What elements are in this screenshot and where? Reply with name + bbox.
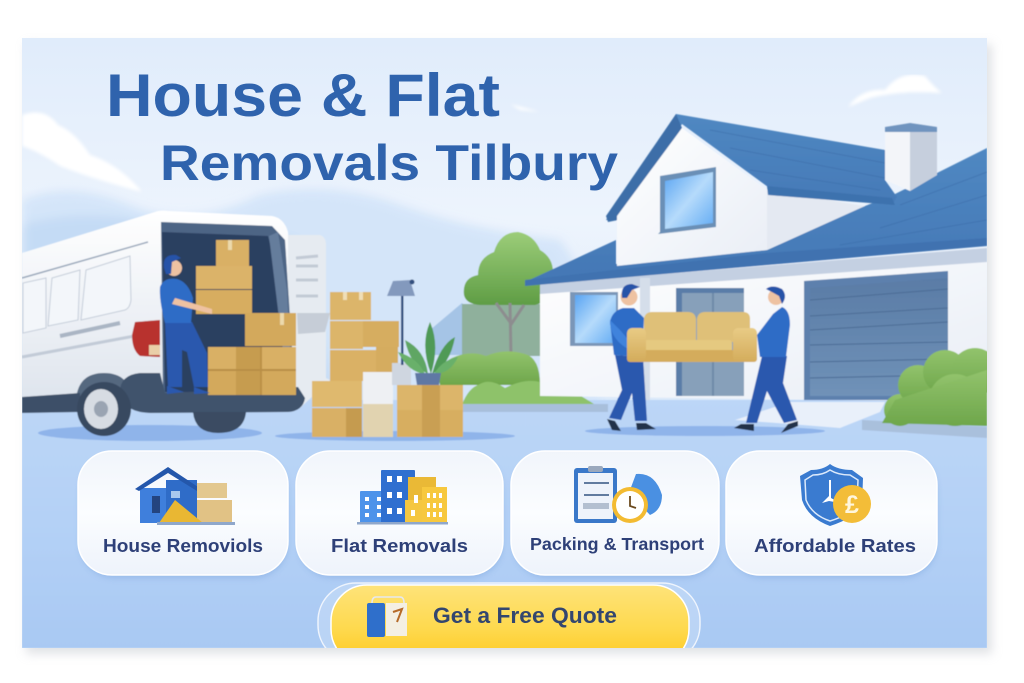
house — [525, 114, 987, 428]
van — [22, 211, 330, 436]
centre bushes — [439, 351, 608, 412]
clouds — [22, 75, 942, 192]
lower walls — [540, 248, 987, 402]
front wheel — [77, 382, 131, 436]
path steps — [735, 402, 885, 428]
sofa — [627, 312, 757, 362]
icon: shield and pound coin: £ — [845, 491, 859, 519]
title: House & Flat — [106, 62, 500, 129]
tree — [462, 232, 553, 358]
chimney — [884, 132, 936, 192]
dormer window — [658, 167, 716, 234]
tail light — [132, 320, 160, 357]
icon: house and boxes — [135, 467, 235, 525]
cargo interior — [161, 222, 295, 395]
box stacks — [312, 292, 463, 437]
label: Affordable Rates — [754, 536, 916, 556]
van side details — [23, 256, 131, 333]
icon: folder and map — [367, 597, 407, 637]
icon: clipboard and clock — [574, 466, 662, 523]
rear wheel — [193, 412, 246, 433]
main roof — [606, 114, 897, 220]
bumper — [120, 373, 305, 413]
title: Removals Tilbury — [160, 135, 618, 191]
mover right — [734, 286, 798, 433]
door — [676, 288, 744, 396]
upper wall — [767, 190, 865, 250]
card: packing and transport — [511, 451, 719, 578]
card: affordable rates — [726, 451, 937, 578]
label: Flat Removals — [331, 536, 468, 556]
card: house removals — [78, 451, 288, 578]
label: House Removiols — [103, 536, 263, 556]
mover loading van — [160, 255, 212, 394]
title — [106, 62, 618, 191]
open rear door — [288, 235, 330, 408]
lamp post — [387, 280, 415, 365]
icon: apartment buildings — [357, 470, 448, 524]
right bush — [862, 348, 999, 438]
label: Packing & Transport — [530, 534, 704, 554]
call to action button — [331, 585, 689, 665]
right wing roof — [525, 148, 987, 284]
card: flat removals — [296, 451, 503, 578]
button label: Get a Free Quote — [433, 603, 617, 628]
distant hills — [22, 189, 600, 420]
icon: shield and pound coin — [800, 464, 871, 526]
gable wall — [617, 128, 767, 266]
boxes in van — [196, 240, 296, 395]
ground shadows — [38, 425, 825, 441]
mover left — [607, 284, 656, 431]
ground — [22, 400, 987, 648]
cta glow ring — [318, 583, 700, 663]
potted plant — [398, 322, 458, 385]
wheel arch — [76, 372, 125, 397]
side window — [570, 292, 618, 346]
garage door — [804, 271, 948, 400]
roof tile lines — [716, 131, 986, 190]
